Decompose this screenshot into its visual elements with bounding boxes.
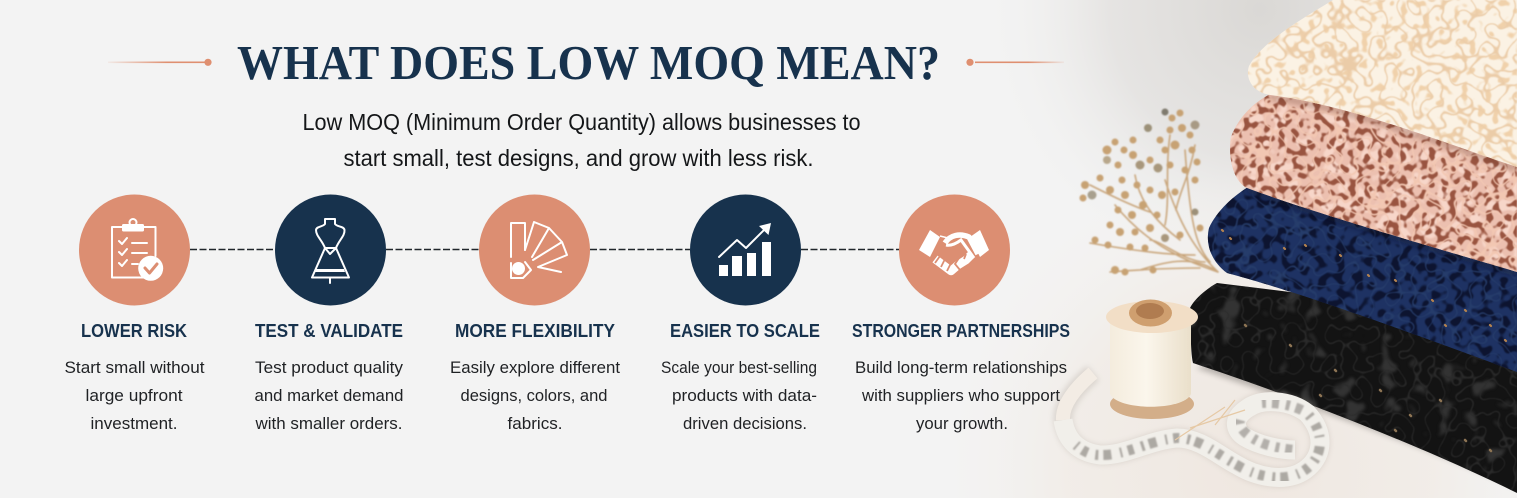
photo: dried flowers [1080, 108, 1218, 276]
text: easier to scale description [661, 358, 817, 433]
photo: thread spool [1106, 300, 1198, 419]
text: test and validate description: with smaller orders. [255, 414, 402, 433]
intro text: start small, test designs, and grow with less risk. [344, 145, 814, 171]
text: easier to scale description: products with data- [672, 386, 817, 405]
navy lace fabric [1200, 185, 1517, 375]
text: more flexibility description: designs, colors, and [460, 386, 608, 405]
icon: dress form [275, 194, 386, 306]
heading: test and validate: TEST & VALIDATE [255, 321, 403, 341]
icon: handshake [899, 194, 1010, 306]
fabric shadow [1196, 350, 1517, 488]
step 1: lower risk [64, 194, 205, 433]
title with flourishes: WHAT DOES LOW MOQ MEAN? [237, 35, 940, 90]
intro text [302, 109, 860, 171]
step 5: stronger partnerships [852, 194, 1070, 433]
text: stronger partnerships description: Build long-term relationships [855, 358, 1067, 377]
photo: stacked lace fabrics [1180, 0, 1517, 498]
text: lower risk description: investment. [90, 414, 178, 433]
icon: fabric swatch fan [479, 194, 590, 306]
heading: more flexibility: MORE FLEXIBILITY [455, 321, 615, 341]
icon: rising bar chart [690, 194, 801, 306]
pink lace fabric [1225, 90, 1517, 275]
text: lower risk description [64, 358, 205, 433]
heading: easier to scale: EASIER TO SCALE [670, 321, 820, 341]
step 2: test and validate [254, 194, 404, 433]
heading: stronger partnerships: STRONGER PARTNERSHIPS [852, 321, 1070, 341]
text: test and validate description: and market demand [254, 386, 404, 405]
text: stronger partnerships description: your growth. [916, 414, 1008, 433]
text: more flexibility description: Easily explore different [450, 358, 620, 377]
text: more flexibility description [450, 358, 620, 433]
icon: clipboard with check [79, 194, 190, 306]
text: easier to scale description: Scale your best-selling [661, 358, 817, 377]
text: more flexibility description: fabrics. [508, 414, 562, 433]
intro text: Low MOQ (Minimum Order Quantity) allows businesses to [302, 109, 860, 135]
text: lower risk description: Start small without [64, 358, 205, 377]
text: stronger partnerships description [855, 358, 1067, 433]
step 4: easier to scale [661, 194, 820, 433]
text: stronger partnerships description: with suppliers who support [861, 386, 1060, 405]
step 3: more flexibility [450, 194, 620, 433]
shadow under cream fabric [1270, 97, 1517, 169]
text: test and validate description: Test product quality [255, 358, 404, 377]
black lace fabric [1180, 275, 1517, 498]
cream lace fabric [1240, 0, 1517, 170]
text: lower risk description: large upfront [86, 386, 183, 405]
text: test and validate description [254, 358, 404, 433]
heading: lower risk: LOWER RISK [81, 321, 187, 341]
shadow under pink fabric [1247, 190, 1517, 274]
photo: measuring tape [1063, 373, 1320, 477]
text: easier to scale description: driven decisions. [683, 414, 807, 433]
dashed connectors [190, 248, 899, 250]
